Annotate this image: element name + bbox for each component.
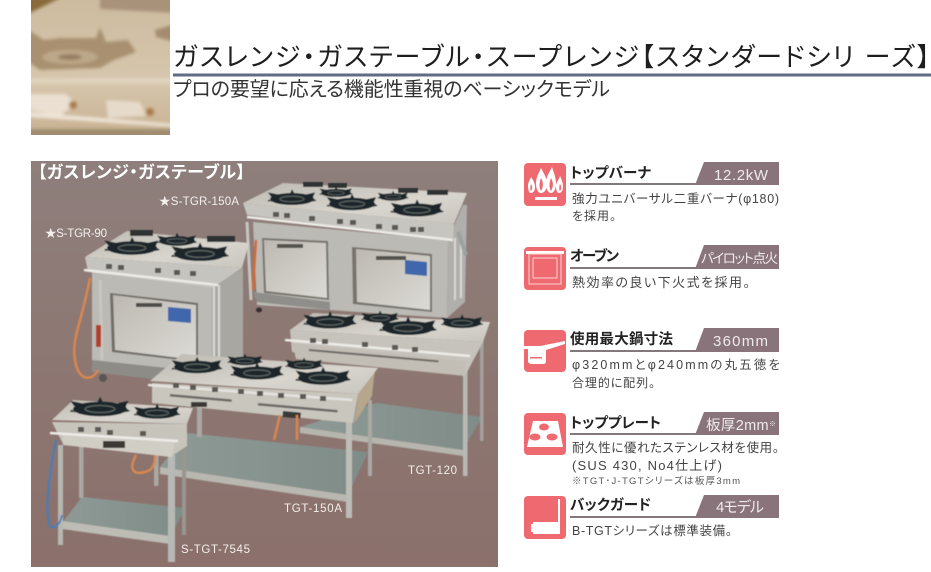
tag: 板厚2mm <box>706 418 769 434</box>
panel heading: 【ガスレンジ・ガステーブル】 <box>38 162 245 182</box>
rule <box>570 516 697 518</box>
rule <box>570 350 697 352</box>
icon: oven <box>524 247 566 290</box>
tag <box>695 495 779 518</box>
tag: パイロット点火 <box>701 251 778 266</box>
feature: max pot size <box>524 328 780 390</box>
tag <box>695 412 779 435</box>
heading: バックガード <box>570 497 651 514</box>
description: 強力ユニバーサル二重バーナ(φ180) <box>572 191 779 206</box>
tag <box>695 328 779 352</box>
tag: 4モデル <box>716 498 764 516</box>
range: S-TGT-7545 <box>48 397 193 562</box>
title: ガスレンジ・ガステーブル・スープレンジ【スタンダードシリ ーズ】 <box>173 42 930 72</box>
label: TGT-120: TGT-120 <box>408 465 457 477</box>
feature: oven <box>524 245 779 290</box>
header photo: burner close-up <box>28 0 175 140</box>
tag: ※ <box>769 420 776 428</box>
rule <box>570 433 697 435</box>
label: S-TGR-90: ★S-TGR-90 <box>45 227 107 240</box>
description: 熱効率の良い下火式を採用。 <box>572 275 750 290</box>
icon: plate <box>524 413 566 455</box>
heading: トップバーナ <box>570 165 651 182</box>
feature: max pot size: 合理的に配列。 <box>572 375 655 390</box>
rule <box>570 183 697 185</box>
subtitle: プロの要望に応える機能性重視のベーシックモデル <box>173 78 610 101</box>
icon: flames <box>524 163 566 206</box>
range: TGT-150A <box>148 354 378 518</box>
feature: top plate <box>524 412 779 487</box>
tag <box>695 162 779 185</box>
feature: top burner <box>524 162 779 223</box>
description: φ320mmとφ240mmの丸五徳を <box>572 357 780 372</box>
heading: 使用最大鍋寸法 <box>570 330 674 348</box>
feature: top burner: を採用。 <box>572 209 616 223</box>
label: S-TGT-7545: S-TGT-7545 <box>181 544 250 556</box>
photo of ranges <box>48 182 490 562</box>
feature: back guard <box>524 495 779 539</box>
feature: top plate: (SUS 430, No4仕上げ) <box>572 458 722 473</box>
rule <box>570 267 697 269</box>
icon: pot <box>524 330 566 372</box>
description: 耐久性に優れたステンレス材を使用。 <box>572 440 779 455</box>
tag <box>695 245 779 269</box>
heading: トッププレート <box>570 415 661 432</box>
panel: product photo <box>31 161 498 567</box>
footnote: ※TGT･J-TGTシリーズは板厚3mm <box>572 475 740 487</box>
label: TGT-150A: TGT-150A <box>284 503 342 515</box>
range: S-TGR-150A <box>243 182 467 318</box>
range: TGT-120 <box>285 310 490 476</box>
icon: back guard <box>524 496 566 539</box>
tag: 360mm <box>713 333 768 350</box>
heading: オーブン <box>570 247 619 265</box>
title rule <box>173 74 931 76</box>
description: B-TGTシリーズは標準装備。 <box>572 523 732 538</box>
label: S-TGR-150A: ★S-TGR-150A <box>159 195 239 208</box>
range: S-TGR-90 <box>74 230 249 385</box>
tag: 12.2kW <box>714 167 769 184</box>
